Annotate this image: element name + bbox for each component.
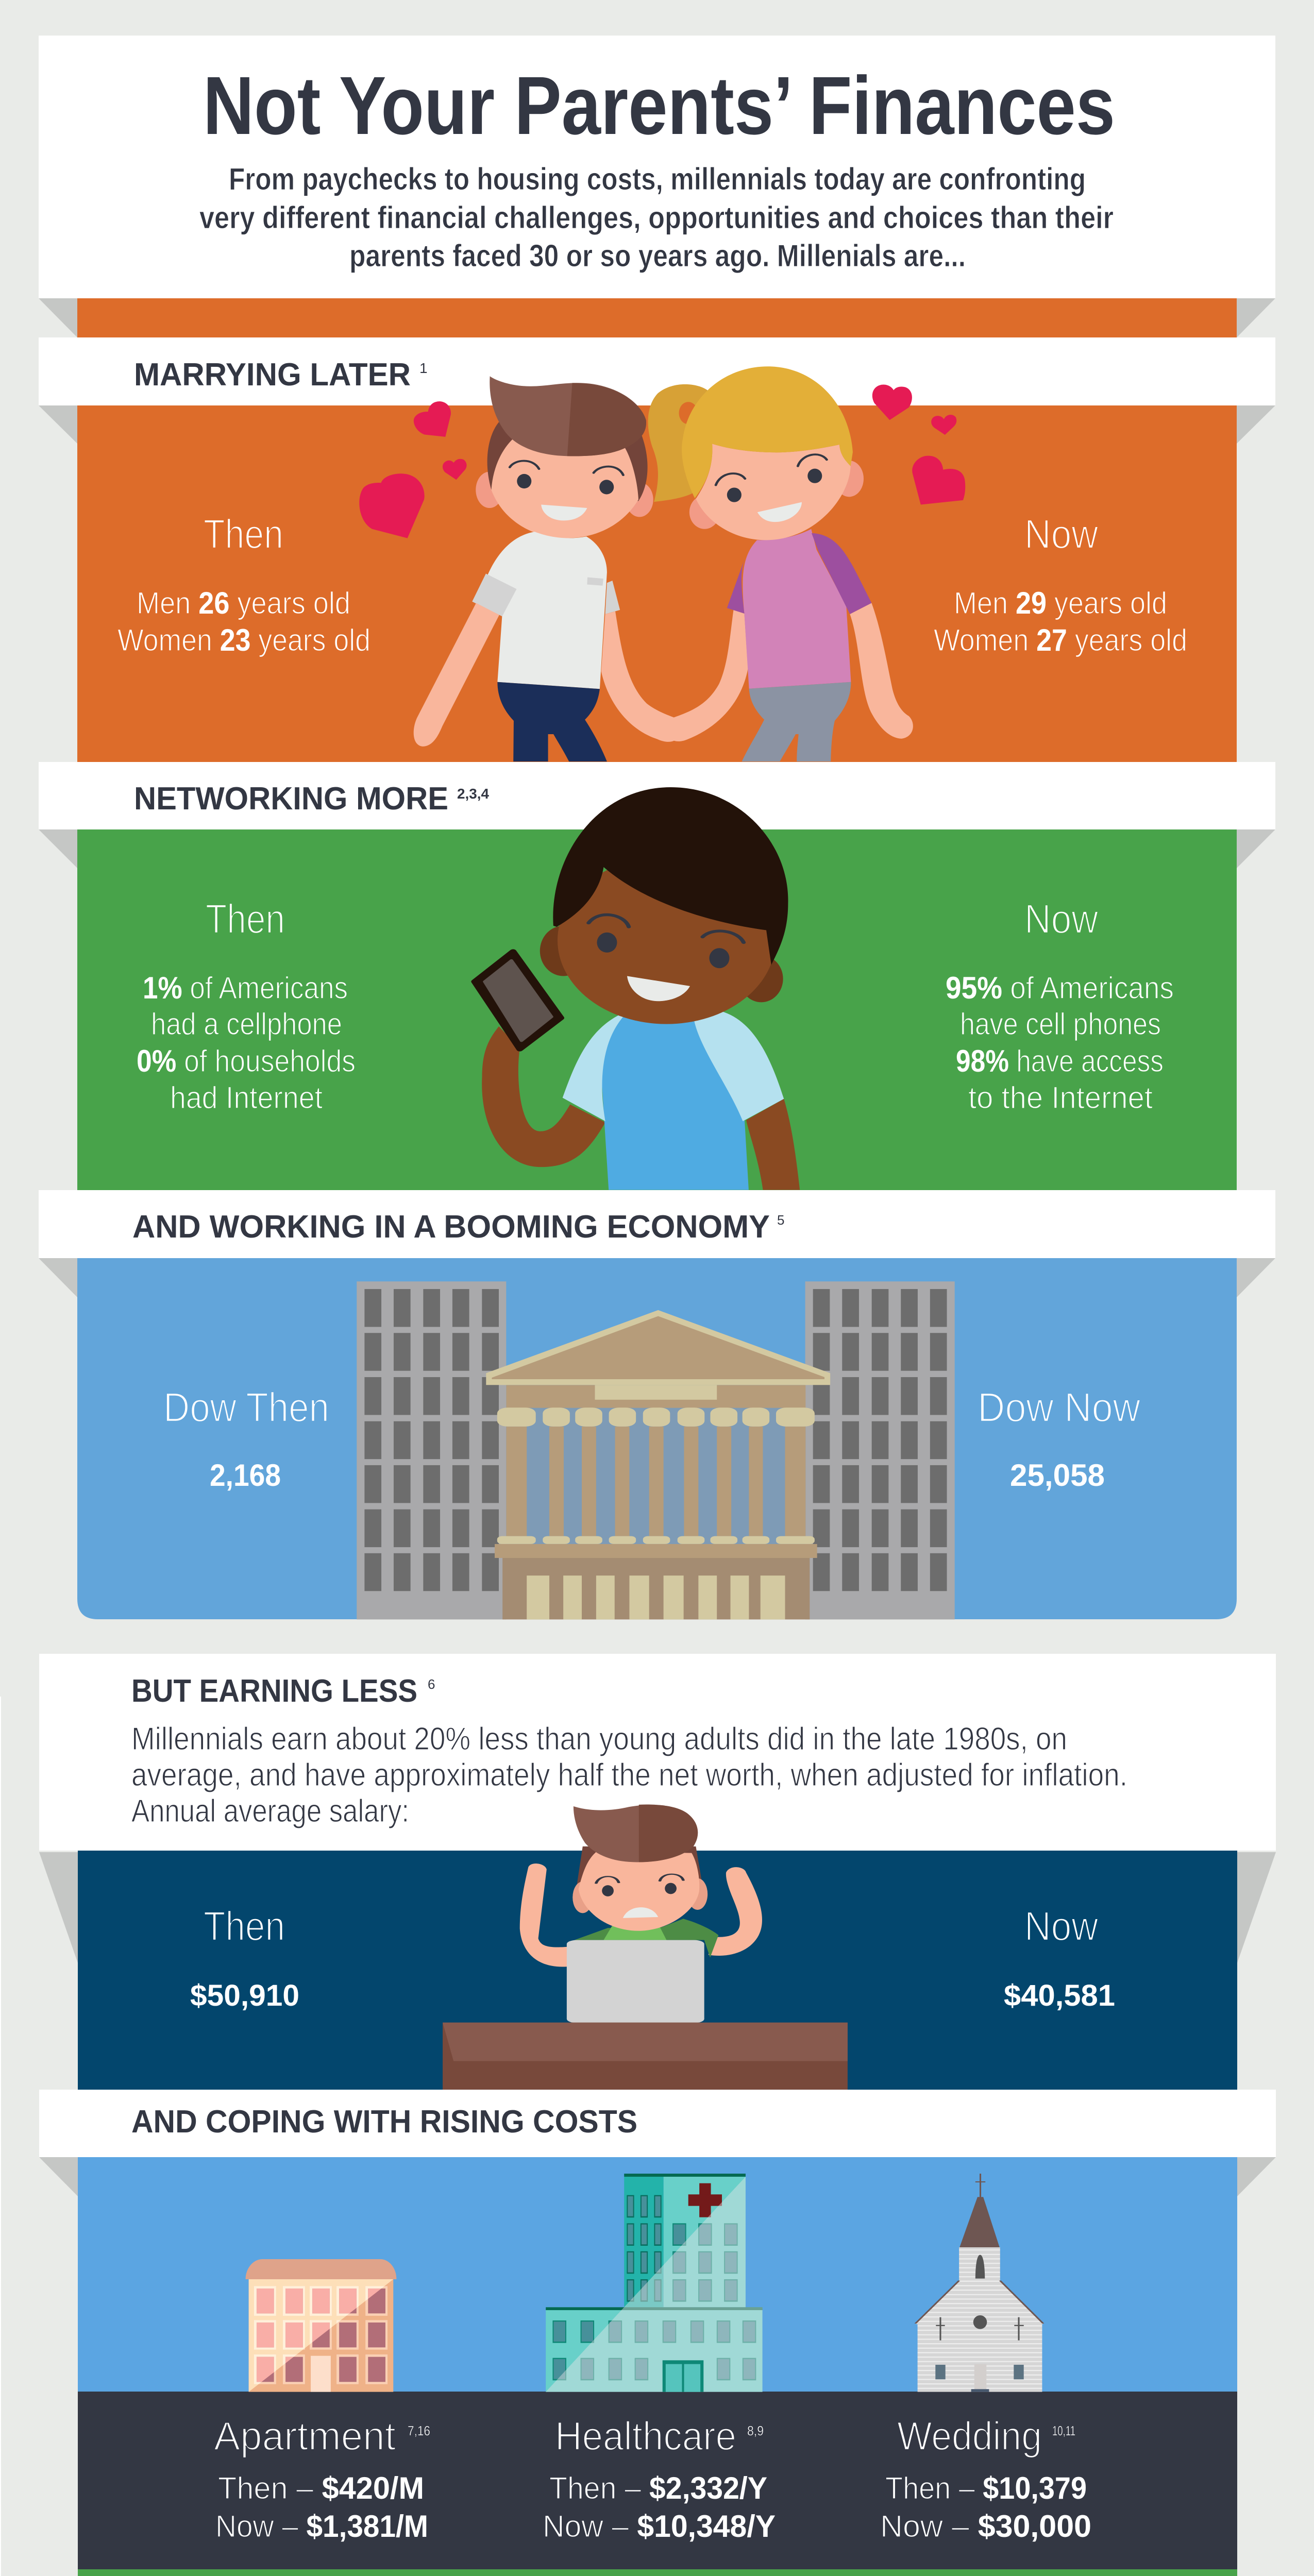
panel: earning less [39,1654,1276,2090]
intro text [199,162,1114,273]
heading: booming economy: 5 [777,1212,784,1228]
girl [648,366,913,761]
healthcare costs [543,2413,776,2544]
wedding costs: Then – $10,379 [885,2471,1087,2505]
apartment costs: Now – $1,381/M [215,2509,428,2544]
now column [946,896,1174,1115]
heading: earning less: 6 [428,1676,435,1692]
illustration: stock exchange and towers [357,1281,955,1619]
dow then: 2,168 [210,1458,281,1493]
now column: Men 29 years old [954,586,1167,620]
then column [117,511,370,657]
healthcare costs: Healthcare [555,2413,736,2459]
heading: rising costs: AND COPING WITH RISING COSTS [131,2104,637,2140]
then column: Then [204,511,283,557]
now column: to the Internet [968,1080,1153,1115]
wedding costs [880,2413,1091,2544]
then column: Then [206,896,285,942]
then column: 0% of households [137,1044,356,1078]
icon: phone [475,952,561,1049]
apartment costs: 7,16 [408,2423,430,2438]
intro text: very different financial challenges, opportunities and choices than their [199,200,1114,235]
wedding costs: Wedding [897,2413,1042,2459]
body text: Annual average salary: [131,1793,409,1829]
then column [137,896,356,1115]
then salary: $50,910 [190,1979,299,2012]
dow now: Dow Now [978,1384,1140,1430]
icon: apartment building [246,2259,396,2392]
heading: earning less: BUT EARNING LESS [131,1673,417,1709]
panel: header [39,36,1275,298]
boy [414,376,676,761]
now column: 95% of Americans [946,971,1174,1005]
now column: Women 27 years old [934,623,1187,657]
icon: church [916,2174,1043,2392]
now salary [1004,1903,1115,2012]
heading: networking more: 2,3,4 [457,786,489,802]
heading: marrying later: 1 [419,360,428,376]
healthcare costs: Then – $2,332/Y [549,2471,767,2505]
dow now: 25,058 [1010,1458,1105,1493]
illustration: couple with hearts [359,366,965,761]
heading: booming economy: AND WORKING IN A BOOMING ECONOMY [132,1209,770,1245]
apartment costs: Then – $420/M [218,2471,424,2505]
title: Not Your Parents’ Finances [203,59,1115,151]
heading: networking more: NETWORKING MORE [134,781,448,817]
body text: average, and have approximately half the net worth, when adjusted for inflation. [131,1757,1127,1793]
heading: marrying later: MARRYING LATER [134,357,411,393]
now column: Now [1024,896,1098,942]
dow then [163,1384,329,1493]
then column: 1% of Americans [143,971,348,1005]
now column: have cell phones [960,1007,1161,1041]
panel: marrying later [39,298,1275,762]
dow now [978,1384,1140,1493]
now salary: $40,581 [1004,1979,1115,2012]
now salary: Now [1024,1903,1098,1949]
illustration: person on phone [475,787,800,1190]
then salary: Then [204,1903,285,1949]
panel: networking more [39,762,1275,1190]
then column: Women 23 years old [117,623,370,657]
wedding costs: 10,11 [1052,2423,1075,2438]
then column: had a cellphone [151,1007,342,1041]
panel: booming economy [39,1190,1275,1619]
then column: Men 26 years old [137,586,350,620]
then column: had Internet [170,1080,323,1115]
wedding costs: Now – $30,000 [880,2509,1091,2544]
icon: hospital [546,2174,763,2392]
intro text: From paychecks to housing costs, millennials today are confronting [229,162,1086,196]
illustration: stressed man at laptop [443,1804,848,2090]
now column [934,511,1187,657]
dow then: Dow Then [163,1384,329,1430]
intro text: parents faced 30 or so years ago. Millenials are... [349,239,966,273]
body text [131,1721,1127,1829]
apartment costs [214,2413,430,2544]
healthcare costs: 8,9 [747,2423,764,2438]
apartment costs: Apartment [214,2413,396,2459]
now column: Now [1024,511,1098,557]
panel: rising costs [39,2090,1276,2576]
body text: Millennials earn about 20% less than young adults did in the late 1980s, on [131,1721,1067,1757]
desk [443,2023,848,2090]
then salary [190,1903,299,2012]
now column: 98% have access [956,1044,1164,1078]
healthcare costs: Now – $10,348/Y [543,2509,776,2544]
